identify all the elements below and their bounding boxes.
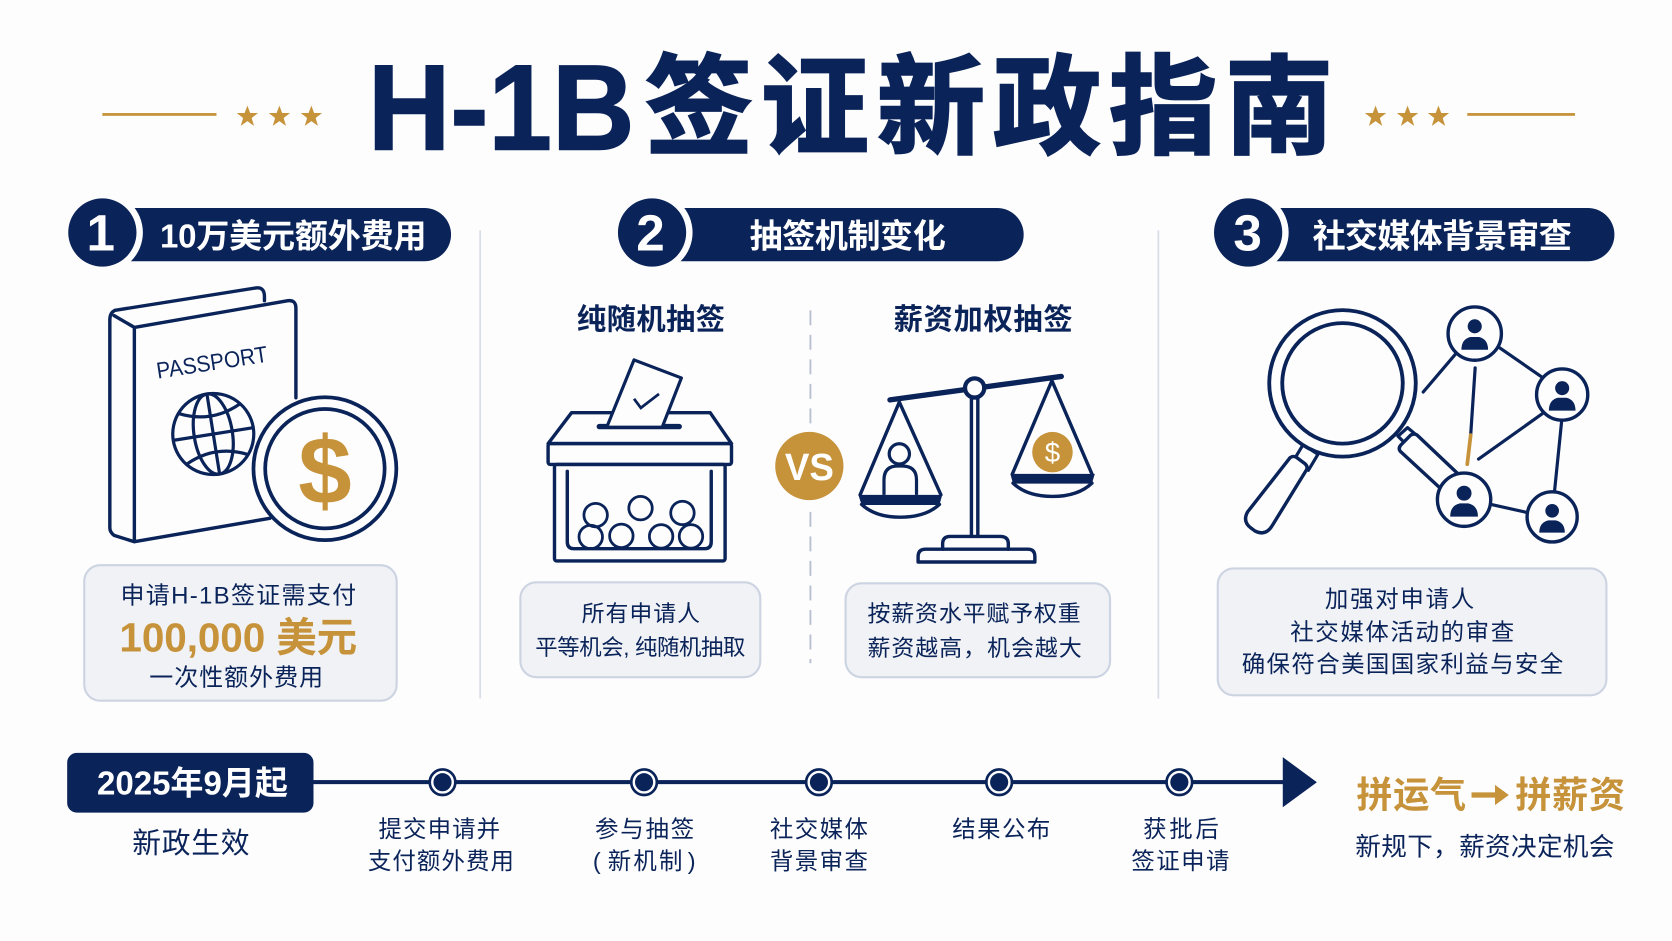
step 2 label: 参与抽签 xyxy=(595,816,694,842)
icon: passport: PASSPORT xyxy=(155,341,269,384)
icon: user node bottom left xyxy=(1437,473,1491,526)
decoration: right title ornament xyxy=(1365,106,1575,126)
callout: weighted lottery description: 按薪资水平赋予权重 xyxy=(867,601,1081,627)
callout: social media review description: 加强对申请人 xyxy=(1325,586,1474,612)
timeline xyxy=(67,753,1317,874)
takeaway: luck to salary: 新规下，薪资决定机会 xyxy=(1355,832,1614,861)
dashed separator xyxy=(809,310,811,663)
timeline nodes xyxy=(430,769,1192,795)
panel: additional fee xyxy=(62,192,451,701)
callout: random lottery description: 所有申请人 xyxy=(582,601,700,627)
step 3 label xyxy=(770,816,868,874)
section heading 1: 1 xyxy=(87,205,115,262)
icon: dollar coin xyxy=(253,397,396,540)
section heading 1: 10万美元额外费用 xyxy=(160,218,427,255)
callout: random lottery description xyxy=(520,582,760,677)
callout: social media review description: 社交媒体活动的审查 xyxy=(1290,619,1514,645)
callout: fee amount: 100,000 美元 xyxy=(119,615,357,661)
panel: lottery mechanism change xyxy=(520,192,1110,677)
callout: weighted lottery description xyxy=(846,583,1110,677)
step 2 label: ) xyxy=(688,848,696,874)
label: policy effective: 新政生效 xyxy=(132,828,250,860)
step 5 label xyxy=(1131,816,1229,874)
icon: passport xyxy=(110,288,396,542)
callout: fee amount: 申请H-1B签证需支付 xyxy=(120,583,356,610)
step 1 label: 提交申请并 xyxy=(379,816,500,842)
step 5 label: 获批后 xyxy=(1143,816,1219,842)
callout: weighted lottery description: 薪资越高，机会越大 xyxy=(867,635,1082,661)
section heading 3 xyxy=(1208,192,1614,273)
step 1 label xyxy=(368,816,514,874)
step 5 label: 签证申请 xyxy=(1131,848,1229,874)
icon: social network links xyxy=(1423,347,1562,512)
decoration: left title ornament xyxy=(102,106,322,126)
title: 签证新政指南 xyxy=(645,48,1333,168)
callout: random lottery description: 平等机会, 纯随机抽取 xyxy=(535,635,745,660)
timeline line and arrow xyxy=(309,757,1317,807)
step 4 label: 结果公布 xyxy=(952,816,1050,842)
start date badge: 2025年9月起 xyxy=(97,765,288,802)
icon: user node bottom right xyxy=(1527,492,1577,542)
right pan with dollar coin: $ xyxy=(1045,437,1060,468)
title: H-1B xyxy=(368,39,634,175)
section heading 1 xyxy=(62,192,451,273)
panel: social media review xyxy=(1208,192,1614,695)
icon: user node right xyxy=(1537,369,1588,420)
divider right xyxy=(1157,230,1159,698)
icon: ballot box xyxy=(548,360,732,561)
takeaway: luck to salary xyxy=(1355,774,1625,861)
step 2 label xyxy=(593,816,696,874)
callout: social media review description xyxy=(1218,568,1606,695)
icon: user node top xyxy=(1448,307,1501,360)
section heading 2: 抽签机制变化 xyxy=(750,218,946,255)
step 3 label: 背景审查 xyxy=(770,848,868,874)
icon: balance scale xyxy=(858,376,1095,562)
step 1 label: 支付额外费用 xyxy=(368,848,514,874)
icon: magnifying glass xyxy=(1246,310,1458,533)
start date badge xyxy=(67,753,314,813)
section heading 2: 2 xyxy=(636,205,665,262)
step 3 label: 社交媒体 xyxy=(770,816,868,842)
callout: fee amount: 一次性额外费用 xyxy=(149,665,323,692)
arrow xyxy=(1472,785,1509,805)
takeaway: luck to salary: 拼薪资 xyxy=(1515,774,1625,815)
divider left xyxy=(479,230,481,698)
section heading 3: 3 xyxy=(1233,205,1262,262)
section heading 3: 社交媒体背景审查 xyxy=(1313,218,1572,255)
callout: social media review description: 确保符合美国国家利益与安全 xyxy=(1242,651,1563,677)
icon: dollar coin: $ xyxy=(298,417,352,524)
badge: VS: VS xyxy=(785,446,834,489)
subheading: salary weighted lottery: 薪资加权抽签 xyxy=(894,304,1073,337)
step 2 label: ( xyxy=(593,848,601,874)
title xyxy=(368,39,1333,175)
takeaway: luck to salary: 拼运气 xyxy=(1356,774,1466,815)
badge: VS xyxy=(775,432,843,500)
subheading: random lottery: 纯随机抽签 xyxy=(577,304,725,337)
step 2 label: 新机制 xyxy=(608,848,682,874)
icon: globe xyxy=(167,388,260,480)
callout: fee amount xyxy=(84,565,397,701)
section heading 2 xyxy=(612,192,1024,273)
left pan with person xyxy=(858,402,942,517)
right pan with dollar coin xyxy=(1010,381,1095,496)
